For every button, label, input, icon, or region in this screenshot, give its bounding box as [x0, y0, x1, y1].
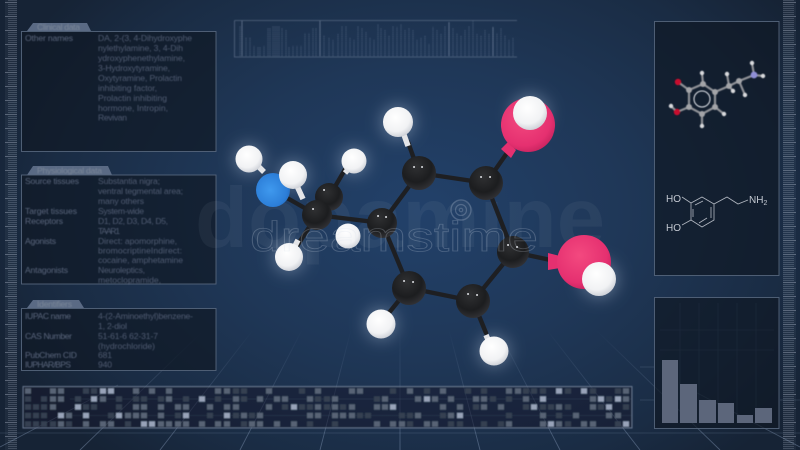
skeletal formula: 2: [763, 200, 767, 207]
text: physiological rows: [25, 176, 183, 285]
molecule: dopamine 3D model: [234, 94, 618, 367]
text: other names: hormone, Intropin,: [98, 103, 168, 113]
text: physiological rows: many others: [98, 196, 144, 206]
text: other names: nylethylamine, 3, 4-Dih: [98, 43, 183, 53]
text: physiological rows: Substantia nigra;: [98, 176, 160, 186]
skeletal formula: [666, 194, 767, 234]
watermark title: dopamine: dopamine: [195, 171, 605, 266]
left ruler: [5, 0, 17, 450]
text: identifier rows: 940: [98, 360, 112, 370]
text: physiological rows: metoclopramide,: [98, 275, 161, 285]
top barcode chart: [234, 20, 517, 57]
tab: identifiers: [27, 299, 84, 309]
glow halos: [234, 94, 618, 367]
text: other names: 3-Hydroxytyramine,: [98, 63, 170, 73]
text: identifier rows: PubChem CID: [25, 350, 77, 360]
oxygen necks: [501, 142, 516, 158]
icon: ball and stick model: [669, 61, 765, 128]
tab: identifiers: Identifiers: [37, 299, 72, 309]
text: identifier rows: CAS Number: [25, 331, 72, 341]
carbon atoms: [302, 156, 529, 318]
data strip: [23, 386, 632, 428]
hydrogen atoms: [236, 96, 616, 366]
panel: molecule structure: [654, 22, 779, 276]
text: identifier rows: 1, 2-diol: [98, 321, 127, 331]
text: physiological rows: Neuroleptics,: [98, 265, 145, 275]
hydrogen behind bond: [336, 224, 360, 248]
text: other names: Other names: [25, 33, 73, 43]
oxygen atoms: [501, 98, 611, 289]
text: identifier rows: 4-(2-Aminoethyl)benzene-: [98, 311, 193, 321]
text: identifier rows: (hydrochloride): [98, 341, 155, 351]
text: physiological rows: Direct: apomorphine,: [98, 236, 177, 246]
white stubs to hydrogens: [256, 132, 490, 344]
panel: identifiers: [22, 299, 216, 370]
skeletal formula: HO: [666, 194, 681, 205]
text: other names: Oxytyramine, Prolactin: [98, 73, 182, 83]
text: physiological rows: cocaine, amphetamine: [98, 255, 183, 265]
text: identifier rows: IUPHAR/BPS: [25, 360, 71, 370]
panel: clinical data: [22, 22, 216, 152]
text: other names: ydroxyphenethylamine,: [98, 53, 185, 63]
text: physiological rows: Source tissues: [25, 176, 79, 186]
nitrogen atom: [256, 173, 290, 207]
skeletal formula: HO: [666, 223, 681, 234]
tab: clinical data: [27, 22, 91, 32]
bonds: [273, 142, 560, 333]
text: physiological rows: TAAR1: [98, 226, 120, 236]
text: physiological rows: Target tissues: [25, 206, 77, 216]
text: identifier rows: 51-61-6 62-31-7: [98, 331, 158, 341]
tab: clinical data: Clinical data: [37, 22, 80, 32]
text: physiological rows: System-wide: [98, 206, 144, 216]
bars: [662, 360, 772, 423]
text: identifier rows: IUPAC name: [25, 311, 71, 321]
perspective floor grid: [0, 330, 800, 450]
text: identifier rows: [25, 311, 193, 370]
text: physiological rows: Antagonists: [25, 265, 68, 275]
text: other names: inhibiting factor,: [98, 83, 157, 93]
text: identifier rows: 681: [98, 350, 112, 360]
panel: bar chart: [654, 298, 779, 428]
tab: physiological data: Physiological data: [37, 166, 102, 176]
text: physiological rows: Agonists: [25, 236, 56, 246]
skeletal formula: NH: [749, 195, 763, 206]
text: physiological rows: ventral tegmental area;: [98, 186, 183, 196]
panel: physiological data: [22, 166, 216, 285]
text: other names: DA, 2-(3, 4-Dihydroxyphe: [98, 33, 192, 43]
text: other names: [25, 33, 192, 122]
text: physiological rows: Receptors: [25, 216, 63, 226]
text: physiological rows: bromocriptineIndirect:: [98, 246, 182, 256]
watermark logo: dreamstime: dreamstime: [250, 213, 538, 260]
watermark logo: dreamstime: [250, 200, 538, 260]
text: other names: Revivan: [98, 112, 127, 122]
text: physiological rows: D1, D2, D3, D4, D5,: [98, 216, 168, 226]
right ruler: [783, 0, 796, 450]
text: other names: Prolactin inhibiting: [98, 93, 167, 103]
